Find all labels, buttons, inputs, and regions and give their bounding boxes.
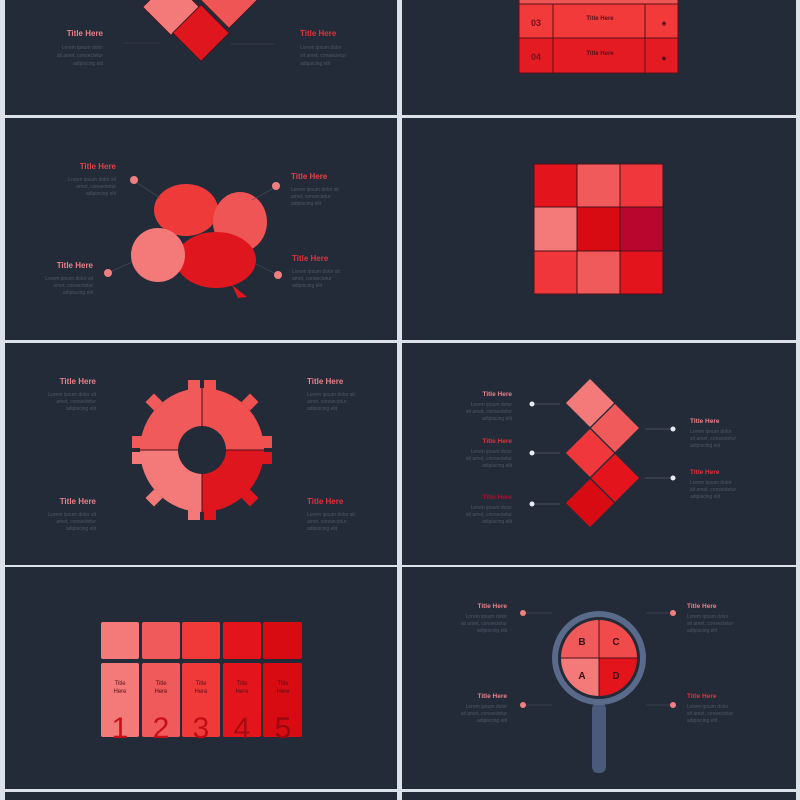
panel: five columns: 2 xyxy=(153,712,169,745)
brain text 3: adipiscing elit xyxy=(63,290,94,296)
text right xyxy=(300,29,346,67)
gear text: amet, consectetur xyxy=(56,519,96,525)
gear quadrants xyxy=(132,380,272,520)
gear text: Title Here xyxy=(60,497,97,506)
brain text 2: Lorem ipsum dolor sit xyxy=(291,187,339,193)
brain text 1 xyxy=(68,162,117,197)
panel: diagonal puzzle chain: Lorem ipsum dolor xyxy=(471,449,512,455)
panel: diagonal puzzle chain: adipiscing elit xyxy=(690,443,721,449)
panel: magnifier: Lorem ipsum dolor xyxy=(687,614,729,620)
gear text: Lorem ipsum dolor sit xyxy=(307,512,355,518)
panel: 3x3 puzzle grid xyxy=(534,164,663,294)
brain shape xyxy=(131,184,267,298)
gear text: adipiscing elit xyxy=(307,406,338,412)
brain text 4: Title Here xyxy=(292,254,329,263)
panel: gear xyxy=(48,377,355,532)
panel: magnifier: adipiscing elit xyxy=(477,718,508,724)
panel: magnifier: Lorem ipsum dolor xyxy=(466,704,507,710)
brain text 2: adipiscing elit xyxy=(291,201,322,207)
panel: magnifier: Lorem ipsum dolor xyxy=(687,704,729,710)
brain text 2: amet, consectetur xyxy=(291,194,331,200)
text right: sit amet, consectetur xyxy=(300,53,346,59)
brain text 2: Title Here xyxy=(291,172,328,181)
panel: magnifier: Title Here xyxy=(687,693,717,700)
text left: Lorem ipsum dolor xyxy=(62,45,103,51)
panel: numbered rows xyxy=(519,0,678,73)
panel: five columns: Here xyxy=(194,689,208,695)
text left: adipiscing elit xyxy=(73,61,104,67)
panel: five columns: Title xyxy=(277,681,289,687)
brain text 4: amet, consectetur xyxy=(292,276,332,282)
panel: five columns: Here xyxy=(154,689,168,695)
brain text 3 xyxy=(45,261,94,296)
panel: diagonal puzzle chain: sit amet, consectetur xyxy=(466,512,512,518)
brain text 3: Lorem ipsum dolor sit xyxy=(45,276,94,282)
panel: five columns: 4 xyxy=(234,712,250,745)
panel: magnifier xyxy=(461,603,733,773)
row 04: ● xyxy=(661,53,667,63)
panel: diagonal puzzle chain: Lorem ipsum dolor xyxy=(690,429,732,435)
panel: magnifier: sit amet, consectetur xyxy=(687,621,733,627)
brain text 1: Lorem ipsum dolor sit xyxy=(68,177,117,183)
brain text 1: Title Here xyxy=(80,162,117,171)
panel: five columns xyxy=(101,622,302,745)
panel: five columns: 3 xyxy=(193,712,209,745)
panel: diagonal puzzle chain: adipiscing elit xyxy=(482,416,513,422)
row 03: ♠ xyxy=(662,18,667,28)
text left: sit amet, consectetur xyxy=(57,53,103,59)
gear text: adipiscing elit xyxy=(66,526,97,532)
text right: Lorem ipsum dolor xyxy=(300,45,342,51)
panel: five columns: Title xyxy=(195,681,207,687)
panel: diagonal puzzle chain: adipiscing elit xyxy=(690,494,721,500)
panel: magnifier: Title Here xyxy=(477,693,507,700)
panel: brain xyxy=(45,162,340,298)
panel: diagonal puzzle chain: Lorem ipsum dolor xyxy=(690,480,732,486)
panel: diagonal puzzle chain: Title Here xyxy=(482,391,512,398)
heart puzzle pieces xyxy=(143,0,257,61)
row 04 xyxy=(531,51,667,63)
gear text xyxy=(48,377,355,532)
panel: diagonal puzzle chain: sit amet, consectetur xyxy=(466,409,512,415)
gear text: adipiscing elit xyxy=(66,406,97,412)
gear text: amet, consectetur xyxy=(307,399,347,405)
brain text 1: amet, consectetur xyxy=(76,184,116,190)
panel: diagonal puzzle chain: Title Here xyxy=(690,418,720,425)
brain text 4: adipiscing elit xyxy=(292,283,323,289)
panel: five columns: 1 xyxy=(112,712,128,745)
brain text 4: Lorem ipsum dolor sit xyxy=(292,269,340,275)
gear text: Title Here xyxy=(307,497,344,506)
panel: diagonal puzzle chain xyxy=(466,379,736,527)
gear text: amet, consectetur xyxy=(56,399,96,405)
gear text: Lorem ipsum dolor sit xyxy=(307,392,355,398)
text right: adipiscing elit xyxy=(300,61,331,67)
brain text 4 xyxy=(292,254,340,289)
brain text 2 xyxy=(291,172,339,207)
panel: magnifier: adipiscing elit xyxy=(687,718,718,724)
panel: magnifier: Lorem ipsum dolor xyxy=(466,614,507,620)
panel: diagonal puzzle chain: Title Here xyxy=(482,438,512,445)
panel: five columns: Here xyxy=(276,689,290,695)
panel: five columns: Here xyxy=(113,689,127,695)
gear text: amet, consectetur xyxy=(307,519,347,525)
panel: magnifier: adipiscing elit xyxy=(687,628,718,634)
panel: diagonal puzzle chain: Title Here xyxy=(690,469,720,476)
row 04: Title Here xyxy=(586,51,614,57)
gear text: Lorem ipsum dolor sit xyxy=(48,392,97,398)
brain text 3: amet, consectetur xyxy=(53,283,93,289)
text left xyxy=(57,29,104,67)
panel: diagonal puzzle chain: Lorem ipsum dolor xyxy=(471,402,512,408)
panel: magnifier: sit amet, consectetur xyxy=(461,621,507,627)
panel: magnifier: D xyxy=(612,671,620,682)
panel: magnifier: Title Here xyxy=(477,603,507,610)
gear text: adipiscing elit xyxy=(307,526,338,532)
panel: diagonal puzzle chain: Lorem ipsum dolor xyxy=(471,505,512,511)
row 03: 03 xyxy=(531,18,541,28)
panel: diagonal puzzle chain: adipiscing elit xyxy=(482,519,513,525)
panel: magnifier: sit amet, consectetur xyxy=(461,711,507,717)
brain text 3: Title Here xyxy=(57,261,94,270)
panel: magnifier: A xyxy=(578,671,586,682)
panel: five columns: 5 xyxy=(275,712,291,745)
row 04: 04 xyxy=(531,52,541,62)
panel: diagonal puzzle chain: sit amet, consectetur xyxy=(690,436,736,442)
gear text: Lorem ipsum dolor sit xyxy=(48,512,97,518)
panel: five columns: Title xyxy=(236,681,248,687)
panel: magnifier: adipiscing elit xyxy=(477,628,508,634)
row 03: Title Here xyxy=(586,16,614,22)
brain text 1: adipiscing elit xyxy=(86,191,117,197)
panel: diagonal puzzle chain: adipiscing elit xyxy=(482,463,513,469)
panel: diagonal puzzle chain: Title Here xyxy=(482,494,512,501)
panel: magnifier: C xyxy=(612,637,620,648)
text right: Title Here xyxy=(300,29,337,38)
gear text: Title Here xyxy=(307,377,344,386)
panel: five columns: Title xyxy=(155,681,167,687)
panel: five columns: Title xyxy=(114,681,126,687)
panel: magnifier: Title Here xyxy=(687,603,717,610)
row 03 xyxy=(531,16,667,28)
panel: five columns: Here xyxy=(235,689,249,695)
panel: heart puzzle xyxy=(57,0,346,67)
panel: diagonal puzzle chain: sit amet, consectetur xyxy=(466,456,512,462)
panel: magnifier: sit amet, consectetur xyxy=(687,711,733,717)
gear text: Title Here xyxy=(60,377,97,386)
panel: diagonal puzzle chain: sit amet, consectetur xyxy=(690,487,736,493)
panel: magnifier: B xyxy=(578,637,586,648)
text left: Title Here xyxy=(67,29,104,38)
